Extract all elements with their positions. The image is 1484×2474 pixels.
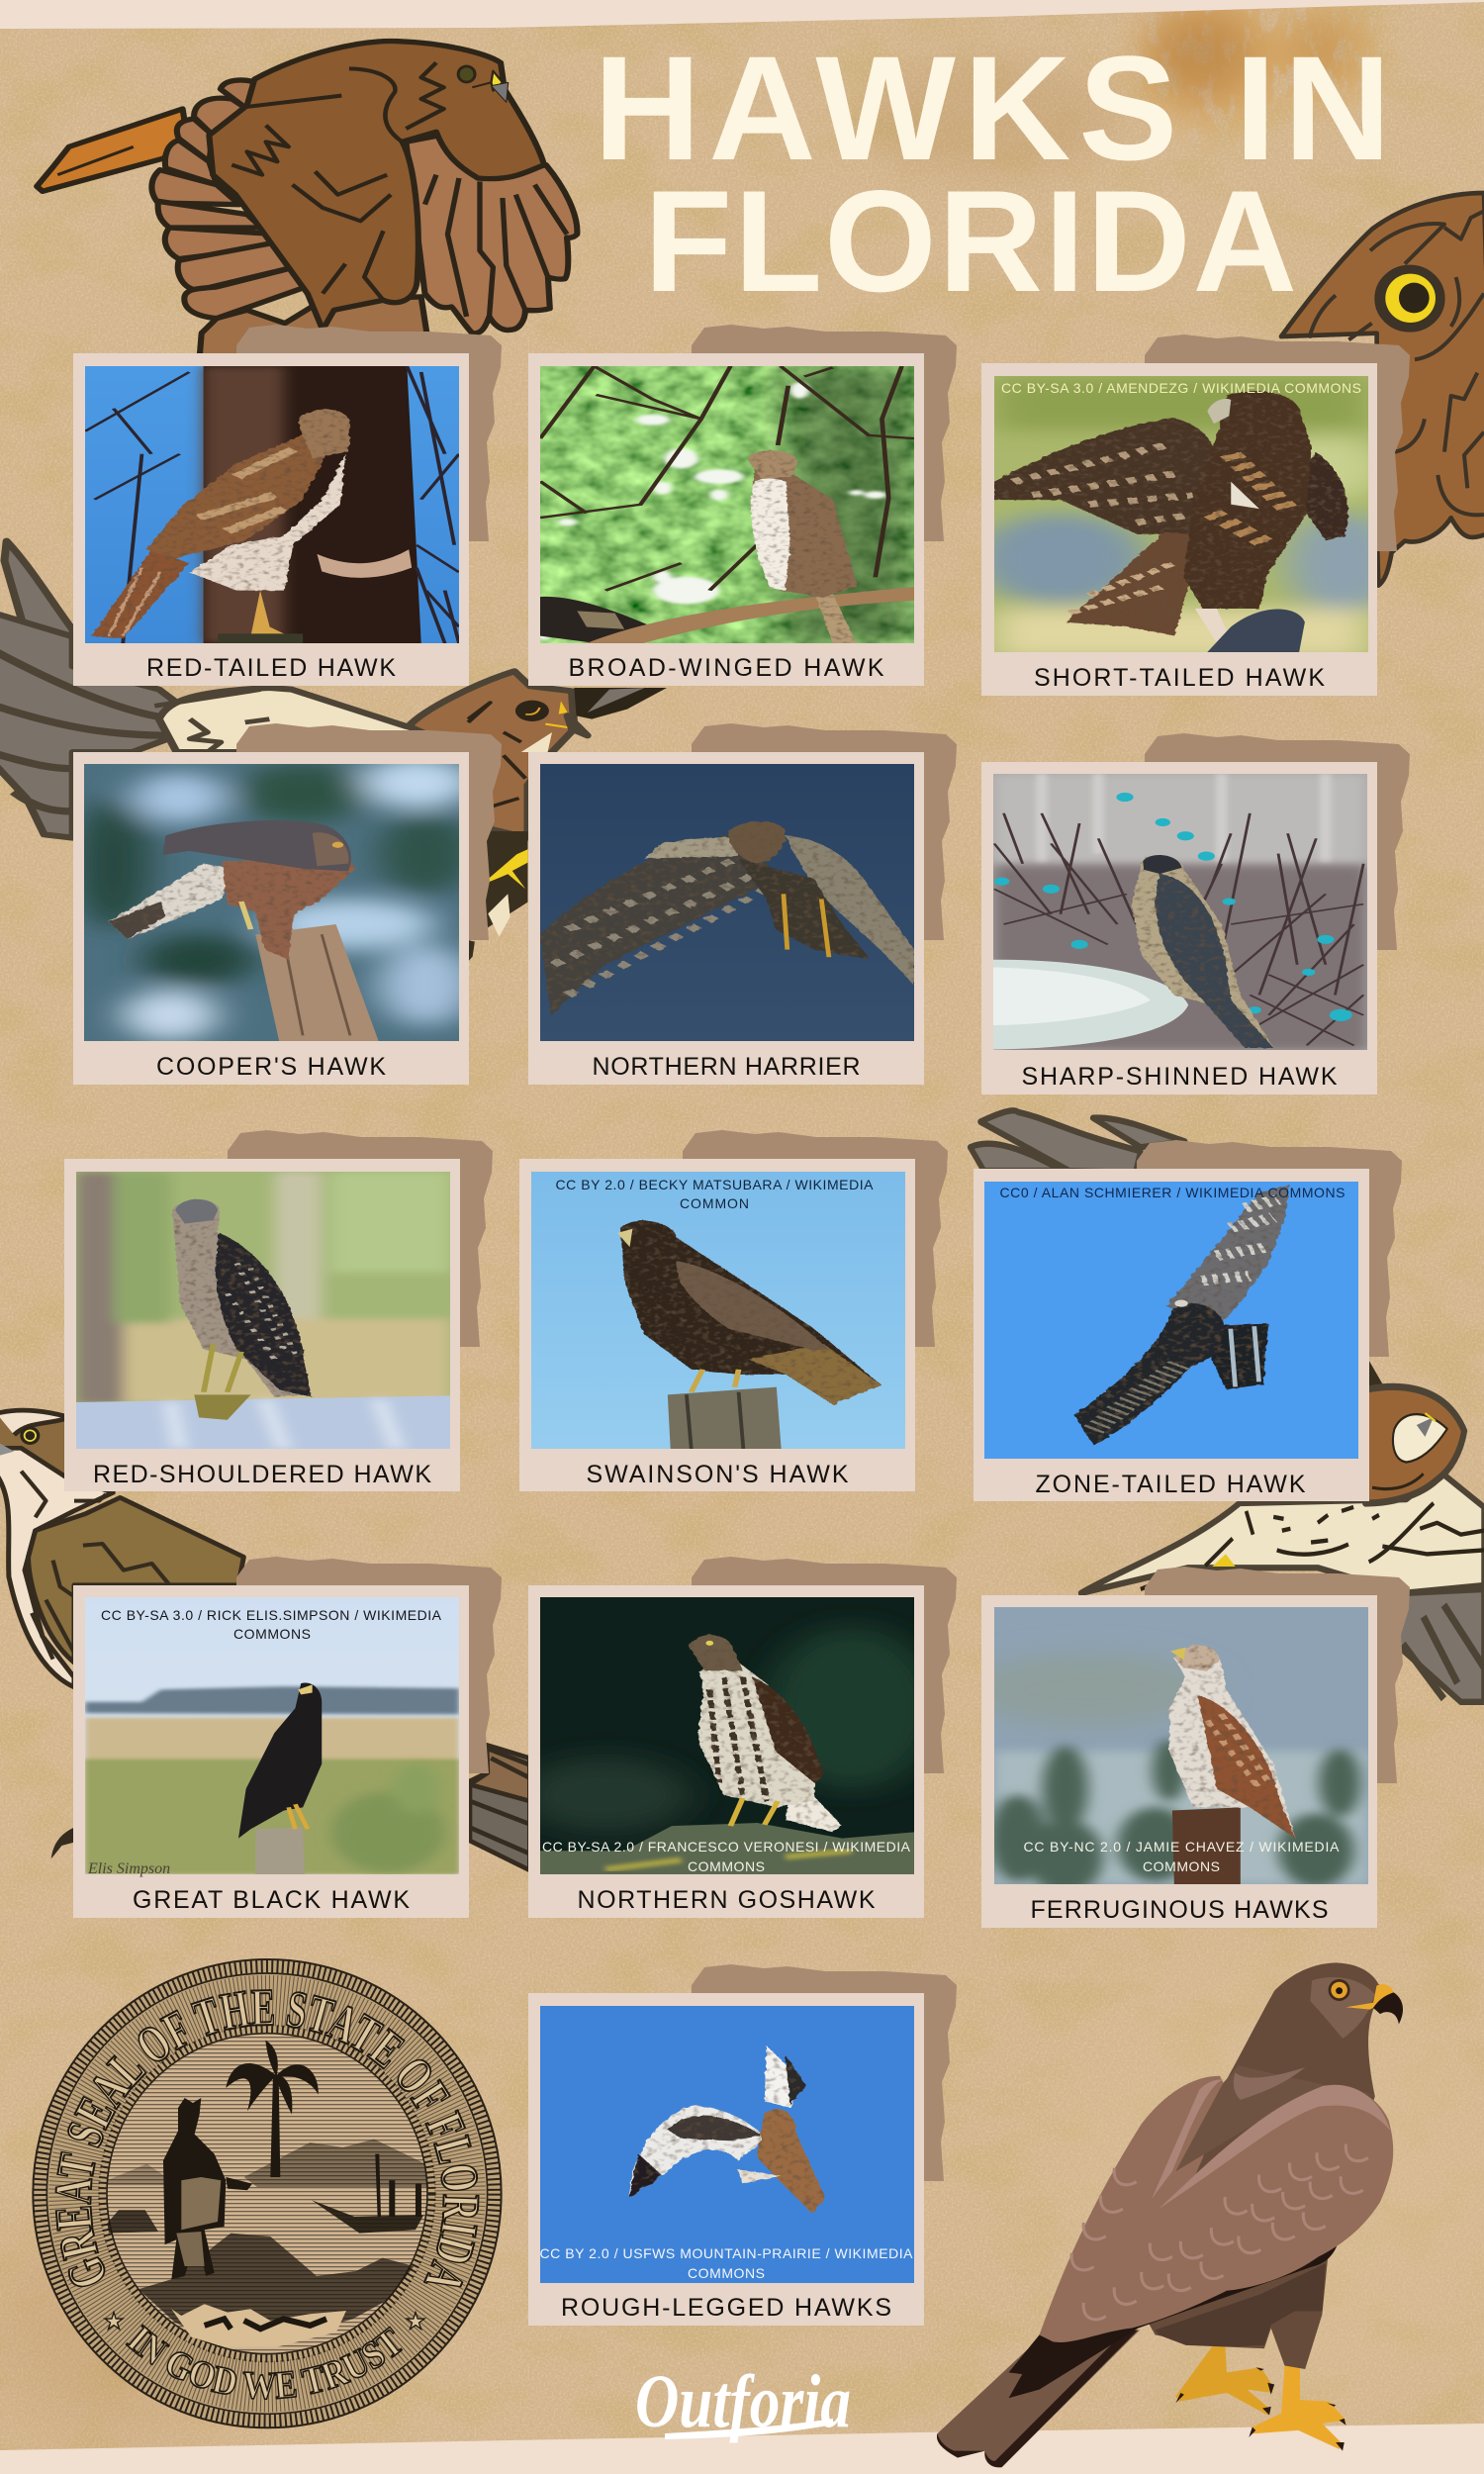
caption: GREAT BLACK HAWK (133, 1886, 410, 1914)
seal star left: ★ (104, 2308, 124, 2333)
photo: swainson's hawk on post (531, 1172, 905, 1449)
photo: short-tailed hawk with spread wing (994, 376, 1368, 652)
illustration: perched hawk, left lower (0, 1410, 530, 1870)
illustration: feathers and cream hawk, right middle (971, 1110, 1484, 1702)
credit line two: COMMONS (233, 1626, 311, 1642)
photo: red-shouldered hawk on white board (76, 1172, 450, 1449)
card: great black hawk (73, 1557, 502, 1918)
photo: zone-tailed hawk soaring (984, 1182, 1358, 1459)
card: red-tailed hawk (73, 325, 502, 686)
card: northern goshawk (520, 1557, 957, 1918)
photo: broad-winged hawk in foliage (540, 366, 914, 643)
card: rough-legged hawks (528, 1964, 957, 2326)
card: swainson's hawk (519, 1130, 948, 1491)
seal lettering: top arc: GREAT SEAL OF THE STATE OF FLORIDA (55, 1989, 479, 2288)
caption: NORTHERN GOSHAWK (578, 1886, 876, 1914)
credit line two: COMMONS (1143, 1858, 1220, 1874)
title (594, 25, 1391, 322)
caption: ROUGH-LEGGED HAWKS (561, 2294, 891, 2322)
title line two: FLORIDA (644, 160, 1297, 322)
caption: RED-SHOULDERED HAWK (93, 1461, 431, 1488)
credit: CC BY-NC 2.0 / JAMIE CHAVEZ / WIKIMEDIA (1023, 1839, 1340, 1855)
photographer mark: Elis Simpson (87, 1860, 170, 1877)
card: ferruginous hawks (966, 1567, 1410, 1928)
card: northern harrier (528, 723, 957, 1085)
photo: great black hawk in field (85, 1597, 459, 1874)
bottom torn paper strip (0, 2424, 1484, 2474)
caption: SHORT-TAILED HAWK (1034, 664, 1325, 692)
card: red-shouldered hawk (64, 1130, 493, 1491)
photo: northern harrier in flight (540, 764, 914, 1041)
credit line two: COMMONS (688, 1858, 765, 1874)
credit: CC0 / ALAN SCHMIERER / WIKIMEDIA COMMONS (999, 1185, 1345, 1200)
photo: sharp-shinned hawk on bird bath (993, 774, 1367, 1050)
card: zone-tailed hawk (974, 1140, 1402, 1501)
title line one: HAWKS IN (594, 25, 1391, 191)
credit: CC BY-SA 3.0 / AMENDEZG / WIKIMEDIA COMMONS (1001, 380, 1361, 396)
photo: ferruginous hawk on post (994, 1607, 1368, 1884)
credit: CC BY-SA 3.0 / RICK ELIS.SIMPSON / WIKIMEDIA (101, 1607, 442, 1623)
seal lettering: bottom arc: IN GOD WE TRUST (125, 2324, 404, 2401)
credit line two: COMMONS (688, 2265, 765, 2281)
illustration: red-tailed hawk top left (37, 42, 577, 356)
credit: CC BY-SA 2.0 / FRANCESCO VERONESI / WIKIMEDIA (542, 1839, 911, 1855)
caption: BROAD-WINGED HAWK (568, 654, 884, 682)
caption: NORTHERN HARRIER (592, 1053, 861, 1081)
illustration: hawk head with yellow eye, right (1281, 193, 1484, 586)
credit: CC BY 2.0 / USFWS MOUNTAIN-PRAIRIE / WIKIMEDIA (540, 2245, 913, 2261)
logo: Outforia: Outforia (635, 2360, 851, 2443)
caption: FERRUGINOUS HAWKS (1031, 1896, 1328, 1924)
card: short-tailed hawk (975, 334, 1410, 696)
seal scene: palm tree, hills, ship, figure (107, 2041, 428, 2342)
caption: COOPER'S HAWK (156, 1053, 386, 1081)
caption: SHARP-SHINNED HAWK (1021, 1063, 1338, 1091)
emblem: great seal of the state of Florida (32, 1958, 503, 2428)
card: broad-winged hawk (528, 325, 957, 686)
photo: rough-legged hawk hovering (540, 2006, 914, 2283)
caption: ZONE-TAILED HAWK (1035, 1471, 1306, 1498)
illustration: flying hawk, left middle (0, 541, 667, 962)
photo: northern goshawk on rocks (540, 1597, 914, 1874)
photo: cooper's hawk on post (84, 764, 459, 1041)
caption: SWAINSON'S HAWK (586, 1461, 849, 1488)
photo: red-tailed hawk on trunk (85, 366, 459, 643)
top torn paper strip (0, 0, 1484, 29)
credit line two: COMMON (680, 1195, 749, 1211)
illustration: perched hawk, bottom right (937, 1962, 1403, 2467)
credit: CC BY 2.0 / BECKY MATSUBARA / WIKIMEDIA (556, 1177, 874, 1192)
seal star right: ★ (405, 2308, 425, 2333)
card: cooper's hawk (73, 723, 502, 1085)
card: sharp-shinned hawk (981, 733, 1410, 1094)
caption: RED-TAILED HAWK (146, 654, 396, 682)
